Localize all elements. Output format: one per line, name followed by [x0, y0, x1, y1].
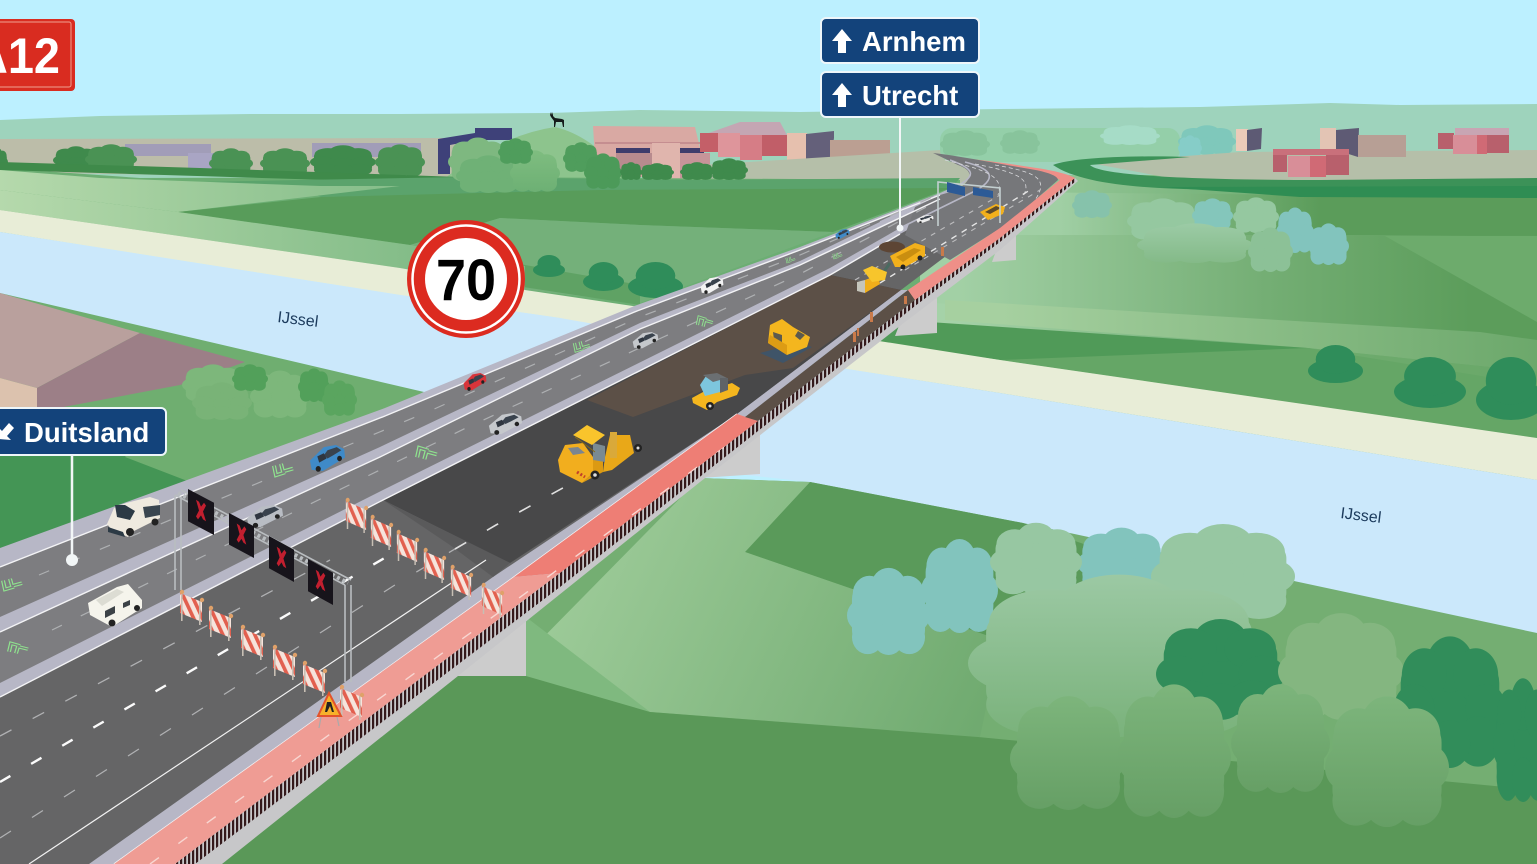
far hazy trees east: [940, 125, 1236, 162]
lane markings: [0, 190, 1040, 864]
dark strip west: [0, 162, 460, 184]
field band lower east: [920, 235, 1537, 345]
river west: [0, 232, 640, 392]
trees west horizon: [0, 144, 425, 177]
buildings tower and block: [787, 131, 890, 170]
land centre: [700, 150, 990, 190]
direction sign Duitsland with pole: Duitsland: [24, 417, 149, 448]
carriageway main: [0, 185, 1040, 864]
direction sign Utrecht with pole: Utrecht: [862, 80, 958, 111]
camper: [88, 584, 142, 627]
river east: [700, 364, 1537, 633]
gantry with matrix signs: [175, 489, 351, 682]
work warning triangle: [318, 693, 341, 728]
distant buildings west: [125, 128, 512, 174]
lighter triangle east: [1385, 236, 1537, 322]
icon: diagonal arrow: [0, 423, 14, 440]
gantry frame: [175, 490, 351, 682]
road far section medians: [880, 160, 989, 228]
direction sign Utrecht with pole: [821, 72, 979, 232]
field medium centre: [410, 218, 833, 303]
icon: up arrow: [832, 83, 852, 107]
light strip east: [945, 300, 1537, 372]
bulldozer machine: [760, 319, 812, 363]
trees at hill: [448, 137, 748, 193]
matrix sign 4: [308, 559, 333, 605]
brown excavated surface: [587, 275, 901, 417]
road deck base: [0, 190, 960, 864]
dirt load: [879, 242, 905, 252]
far yellow truck: [980, 204, 1005, 220]
buildings centre: [593, 122, 787, 181]
field: west top green: [0, 168, 960, 330]
cycle lane red bright: [514, 414, 758, 577]
bushes north-west of road: [533, 255, 683, 298]
route shield A12: [0, 19, 75, 91]
icon: deer silhouette: [550, 112, 564, 127]
dark left field: [0, 408, 190, 552]
road far section lane curves: [945, 160, 1041, 200]
cycle lane red far: [908, 178, 1075, 300]
road far curve red edge: [908, 158, 1075, 300]
excavator far: [857, 263, 890, 293]
dark field below strip: [860, 320, 1537, 438]
direction sign Duitsland with pole: [0, 408, 166, 566]
matrix sign 3: [269, 536, 294, 582]
matrix sign 1: [188, 489, 214, 535]
carriageway far: [0, 195, 940, 617]
embankment strip west: [0, 190, 525, 290]
speed limit sign 70: 70: [436, 248, 496, 313]
trees south-east group: [847, 523, 1537, 827]
far overhead gantry: [938, 182, 1000, 226]
road barriers row 2: [346, 498, 504, 618]
road barriers row 1: [180, 590, 364, 720]
field band upper east: [1000, 192, 1537, 236]
south lower field: [218, 676, 1537, 864]
hill with deer: [440, 127, 640, 195]
road far section asphalt: [905, 153, 1058, 260]
beige bank west: [0, 210, 660, 340]
transition wedge: [383, 500, 510, 577]
cycle lane dashes: [150, 432, 745, 864]
roller machine: [692, 373, 740, 410]
beige bank east: [815, 338, 1537, 480]
direction sign Arnhem: [821, 18, 979, 63]
grey verge strip under construction: [737, 290, 908, 417]
left bank land: [0, 293, 424, 600]
matrix sign 2: [229, 513, 254, 558]
distant hills: [0, 103, 1537, 180]
road surface chevrons: [3, 253, 842, 653]
van: [107, 497, 160, 537]
sky: [0, 0, 1537, 200]
trees north-east group: [1072, 190, 1349, 272]
tan field east: [1090, 150, 1537, 182]
bushes east: [1308, 345, 1537, 420]
icon: up arrow: [832, 29, 852, 53]
south bank base field: [218, 478, 1537, 864]
cars: [247, 215, 934, 528]
cycle lane red near: [114, 573, 560, 864]
fence railings: [175, 178, 1076, 864]
river label east: IJssel: [1340, 505, 1382, 527]
distant tan land: [0, 138, 460, 180]
south pale field: [526, 478, 1000, 737]
bridge underside slab: [175, 178, 1078, 864]
curved hedge east: [1053, 156, 1537, 197]
speed limit sign 70: [407, 220, 525, 338]
white edge lines: [0, 195, 940, 864]
river label west: IJssel: [277, 309, 319, 331]
dump truck: [890, 243, 925, 270]
dark hedge band: [1160, 186, 1537, 198]
field dark centre: [178, 188, 950, 245]
bridge piers: [453, 232, 1016, 676]
pale field west: [0, 170, 400, 212]
south dark field: [745, 482, 1130, 640]
buildings east: [1236, 128, 1509, 177]
milled dark asphalt: [383, 275, 901, 563]
south wedge: [526, 617, 650, 712]
brown warehouse roof: [0, 293, 245, 412]
direction sign Arnhem: Arnhem: [862, 26, 966, 57]
brown verge section: [745, 290, 915, 421]
road workers: [853, 247, 944, 342]
teal strip: [143, 177, 960, 197]
field east base: [855, 175, 1537, 480]
carriageway middle: [0, 199, 945, 683]
paver machine: [558, 425, 642, 483]
trees near warehouse: [182, 364, 357, 420]
